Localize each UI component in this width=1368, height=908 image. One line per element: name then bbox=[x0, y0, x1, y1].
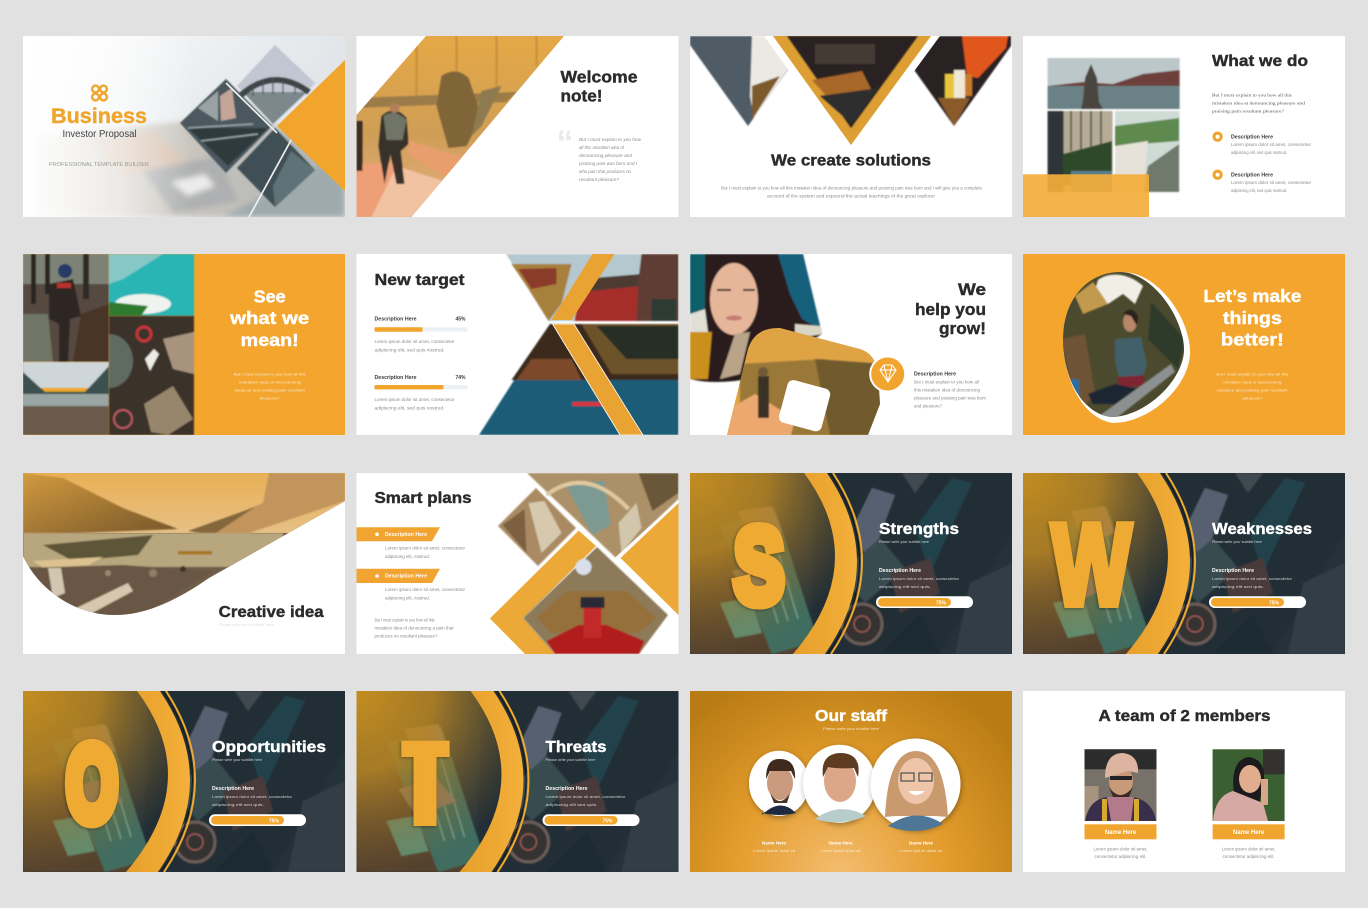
description: But I must explain to you how all bbox=[914, 380, 979, 384]
description: pleasure and praising pain was born bbox=[914, 396, 987, 400]
description bbox=[212, 786, 293, 807]
member one: Lorem ipsum dolor sit amet, bbox=[1094, 846, 1148, 851]
name three bbox=[900, 840, 943, 853]
title: We help you grow: We bbox=[958, 281, 986, 299]
progress: 45%: Lorem ipsum dolor sit amet, consectetur bbox=[374, 339, 455, 344]
photo: lower water diamond bbox=[237, 128, 315, 207]
name two: Name Here bbox=[829, 840, 853, 846]
title: See what we mean: See bbox=[254, 287, 286, 307]
orange ring bbox=[126, 691, 195, 872]
member two: Name Here bbox=[1233, 830, 1265, 836]
panel: slide 9 Creative idea bbox=[23, 473, 345, 654]
body text: But I must explain to you how all this bbox=[1212, 92, 1292, 98]
orange tag two: Description Here bbox=[385, 574, 427, 580]
quote text: resultant pleasure? bbox=[579, 177, 620, 182]
member two bbox=[1213, 749, 1285, 859]
photo: mountain lake bbox=[23, 362, 109, 435]
panel: slide 11 Strengths bbox=[690, 473, 1012, 654]
title: We help you grow bbox=[915, 281, 986, 338]
quote text: But I must explain to you how bbox=[579, 137, 642, 142]
progress: 74%: 74% bbox=[455, 375, 466, 381]
panel: slide 10 Smart plans bbox=[356, 473, 678, 654]
description: Lorem ipsum dolor sit amet, consectetur bbox=[1212, 576, 1293, 581]
orange chevron bbox=[490, 530, 596, 654]
orange tag one bbox=[356, 527, 440, 541]
body text: pleasure? bbox=[1242, 396, 1263, 400]
description: adipiscing elit sed quis. bbox=[212, 802, 264, 807]
member one: Name Here bbox=[1105, 830, 1137, 836]
title: Welcome note: note! bbox=[560, 88, 602, 106]
photo: upper bridge diamond bbox=[237, 45, 315, 124]
subtitle: Please write your subtitle here bbox=[212, 757, 263, 762]
orange stripe upper bbox=[552, 254, 614, 320]
description: Lorem ipsum dolor sit amet, consectetur bbox=[546, 794, 626, 799]
photo: sea and stones bbox=[1048, 58, 1180, 109]
subtitle: Please write your subtitle here bbox=[823, 726, 880, 731]
progress: 45%: 45% bbox=[455, 317, 466, 323]
description one: adipiscing elit, sed quis nostrud. bbox=[1231, 150, 1287, 155]
photo: town upper band bbox=[506, 254, 678, 321]
description: Description Here bbox=[1212, 568, 1254, 574]
progress bar 75%: 75% bbox=[269, 818, 280, 824]
progress: 74% bbox=[374, 375, 468, 410]
body text bbox=[1216, 372, 1288, 400]
subtitle: Investor Proposal bbox=[62, 129, 136, 140]
text one bbox=[385, 546, 466, 559]
text two bbox=[385, 587, 466, 600]
title: We help you grow: help you bbox=[915, 301, 986, 319]
portrait: blonde woman bbox=[870, 738, 960, 831]
description one: Description Here bbox=[1231, 134, 1273, 140]
photo: right triangle bbox=[914, 36, 1012, 127]
progress bar 75% bbox=[209, 814, 306, 826]
orange ring bbox=[460, 691, 529, 872]
member one: consectetur adipiscing elit. bbox=[1094, 854, 1146, 859]
photo: orange parallelogram bbox=[356, 36, 566, 217]
progress: 45%: Description Here bbox=[374, 317, 417, 323]
icon: bullet one bbox=[1212, 132, 1223, 142]
description: Description Here bbox=[914, 372, 956, 378]
letter T bbox=[402, 716, 450, 850]
panel: slide 1 Business cover bbox=[23, 36, 345, 217]
title: Let's make things better: Let’s make bbox=[1203, 286, 1302, 306]
name two: Lorem ipsum dolor sit bbox=[821, 848, 862, 853]
photo: aerial city bbox=[690, 473, 1012, 654]
portrait: young man bbox=[803, 745, 876, 823]
progress: 74%: Lorem ipsum dolor sit amet, consectetur bbox=[374, 397, 455, 402]
name two bbox=[821, 840, 862, 853]
description: adipiscing elit sed quis. bbox=[546, 802, 598, 807]
quote text: all this mistaken idea of bbox=[579, 145, 625, 150]
progress: 45%: adipiscing elit, sed quis nostrud. bbox=[374, 348, 444, 352]
title: Creative idea: Creative idea bbox=[219, 604, 324, 621]
photo: plants and phone bbox=[1048, 111, 1113, 192]
body text bbox=[234, 372, 306, 400]
subtitle: Please write your subtitle here bbox=[219, 623, 274, 627]
title: We help you grow: grow! bbox=[939, 320, 986, 338]
photo: aerial city bbox=[1023, 473, 1345, 654]
text two: Lorem ipsum dolor sit amet, consectetur bbox=[385, 587, 466, 592]
progress bar 75%: 75% bbox=[1269, 600, 1280, 606]
body text: But I must explain to you how all this mistaken idea of denouncing pleasure and praising pain was born and I will give you a complete bbox=[721, 186, 983, 190]
quote text: denouncing pleasure and bbox=[579, 153, 633, 158]
name three: Lorem ipsum dolor sit bbox=[900, 848, 943, 853]
body text: pleasure? bbox=[260, 396, 281, 400]
photo: aerial city bbox=[356, 691, 678, 872]
orange ring bbox=[1126, 473, 1195, 654]
photo: hiker in forest bbox=[23, 254, 109, 362]
orange stripe lower bbox=[552, 324, 643, 435]
name one bbox=[753, 840, 796, 853]
title: Our staff: Our staff bbox=[815, 708, 888, 725]
description two bbox=[1231, 172, 1312, 193]
photo: aerial city bbox=[23, 691, 345, 872]
panel: slide 5 See what we mean bbox=[23, 254, 345, 435]
text one: adipiscing elit, nostrud. bbox=[385, 554, 430, 559]
progress bar 75% bbox=[876, 596, 973, 608]
title: Weaknesses: Weaknesses bbox=[1212, 521, 1312, 538]
letter O: O bbox=[66, 724, 118, 844]
description bbox=[1212, 568, 1293, 589]
title: Threats: Threats bbox=[546, 739, 606, 756]
body text bbox=[721, 186, 983, 198]
body text: mistaken idea of denouncing bbox=[1223, 380, 1281, 384]
photo: flat lay bbox=[109, 316, 194, 435]
orange ring bbox=[793, 473, 862, 654]
title: Opportunities: Opportunities bbox=[212, 739, 326, 756]
description bbox=[546, 786, 626, 807]
panel: slide 16 A team of 2 members bbox=[1023, 691, 1345, 872]
description one bbox=[1231, 134, 1312, 155]
orange V with photo bbox=[764, 36, 940, 157]
orange right triangle bbox=[620, 503, 678, 615]
title: Welcome note bbox=[560, 70, 638, 102]
tagline: PROFESSIONAL TEMPLATE BUILDER bbox=[49, 162, 149, 168]
title: See what we mean: what we bbox=[229, 308, 309, 328]
letter T: T bbox=[402, 716, 450, 850]
panel: slide 3 We create solutions bbox=[690, 36, 1012, 217]
title: Let's make things better bbox=[1203, 286, 1302, 350]
description: this mistaken idea of denouncing bbox=[914, 388, 981, 392]
panel: slide 4 What we do bbox=[1023, 36, 1345, 217]
body text: pleasure and praising pain resultant bbox=[235, 388, 306, 392]
title: Let's make things better: things bbox=[1223, 308, 1282, 328]
panel: slide 8 Let's make things better bbox=[1023, 254, 1345, 435]
photo: left arches diamond bbox=[498, 488, 576, 566]
photo: lake in orange tint bbox=[23, 473, 345, 654]
panel: slide 6 New target bbox=[356, 254, 678, 435]
subtitle: Please write your subtitle here bbox=[546, 757, 596, 762]
progress bar 75%: 75% bbox=[936, 600, 947, 606]
progress: 45% bbox=[374, 317, 468, 352]
title: Smart plans: Smart plans bbox=[374, 490, 472, 507]
description two: Description Here bbox=[1231, 172, 1273, 178]
photo: left triangle bbox=[690, 36, 788, 126]
description: Lorem ipsum dolor sit amet, consectetur bbox=[879, 576, 960, 581]
body text: mistaken idea of denouncing bbox=[239, 380, 301, 384]
photo: red carpet interior bbox=[523, 547, 668, 654]
orange block bbox=[1023, 174, 1149, 217]
body text: But I must explain to you how all this bbox=[234, 372, 306, 376]
orange tag two bbox=[356, 569, 440, 583]
photo: vaulted ceiling bbox=[527, 473, 678, 558]
description two: Lorem ipsum dolor sit amet, consectetur bbox=[1231, 180, 1312, 185]
photo: man on bench bbox=[1058, 269, 1188, 419]
name one: Name Here bbox=[762, 840, 786, 846]
orange triangle bbox=[277, 60, 345, 191]
progress: 74%: adipiscing elit, sed quis nostrud. bbox=[374, 406, 444, 410]
title: We create solutions: We create solutions bbox=[771, 153, 931, 170]
quote text bbox=[578, 137, 642, 182]
description: Description Here bbox=[879, 568, 921, 574]
icon: business logo bbox=[92, 86, 107, 100]
subtitle: Please write your subtitle here bbox=[1212, 539, 1263, 544]
photo: lake lower band bbox=[479, 324, 678, 435]
subtitle: Please write your subtitle here bbox=[879, 539, 930, 544]
letter S: S bbox=[734, 506, 784, 626]
title: See what we mean bbox=[230, 290, 309, 346]
icon: diamond badge bbox=[870, 356, 905, 392]
body text: account of the system and expound the actual teachings of the great explorer bbox=[767, 194, 936, 198]
body text: mistaken idea at denouncing pleasure and bbox=[1212, 100, 1306, 106]
description: and pleasure? bbox=[914, 404, 943, 408]
description one: Lorem ipsum dolor sit amet, consectetur bbox=[1231, 142, 1312, 147]
panel: slide 14 Threats bbox=[356, 691, 678, 872]
description bbox=[879, 568, 960, 589]
body text: pleasure and praising pain resultant bbox=[1217, 388, 1288, 392]
portrait: man with glasses bbox=[749, 751, 809, 816]
body text: praising pain resultant pleasure? bbox=[1212, 108, 1284, 114]
orange tag one: Description Here bbox=[385, 532, 427, 538]
description: adipiscing elit sed quis. bbox=[1212, 584, 1264, 589]
paragraph: But I must explain to you how all this bbox=[374, 618, 434, 622]
title: Welcome note: Welcome bbox=[560, 68, 638, 86]
description: Lorem ipsum dolor sit amet, consectetur bbox=[212, 794, 293, 799]
title: A team of 2 members: A team of 2 members bbox=[1098, 708, 1270, 725]
photo blob bbox=[720, 324, 885, 439]
member two: Lorem ipsum dolor sit amet, bbox=[1222, 846, 1276, 851]
progress bar 75% bbox=[542, 814, 640, 826]
title: See what we mean: mean! bbox=[241, 330, 299, 350]
progress bar 75%: 75% bbox=[602, 818, 613, 824]
body text bbox=[1212, 92, 1306, 114]
body text: But I must explain to you how all this bbox=[1216, 372, 1288, 376]
title: Strengths: Strengths bbox=[879, 521, 959, 538]
panel: slide 12 Weaknesses bbox=[1023, 473, 1345, 654]
photo: left harbour diamond bbox=[180, 79, 272, 173]
photo: woman portrait bbox=[690, 254, 822, 382]
description two: adipiscing elit, sed quis nostrud. bbox=[1231, 188, 1287, 193]
quote text: praising pain was born and I bbox=[578, 161, 638, 166]
name one: Lorem ipsum dolor sit bbox=[753, 848, 796, 853]
paragraph bbox=[374, 618, 454, 638]
member one bbox=[1084, 749, 1156, 859]
icon: quote mark: “ bbox=[556, 124, 574, 162]
title: New target: New target bbox=[374, 272, 464, 289]
description: adipiscing elit sed quis. bbox=[879, 584, 931, 589]
panel: slide 13 Opportunities bbox=[23, 691, 345, 872]
paragraph: mistaken idea of denouncing a pain that bbox=[374, 626, 454, 630]
white rounded square bbox=[778, 379, 832, 433]
description: Description Here bbox=[546, 786, 588, 792]
panel: slide 2 Welcome note bbox=[356, 36, 678, 217]
icon: bullet two bbox=[1212, 170, 1223, 180]
title: Business: Business bbox=[51, 103, 147, 128]
text two: adipiscing elit, nostrud. bbox=[385, 596, 430, 600]
panel: slide 7 We help you grow bbox=[690, 254, 1012, 439]
progress bar 75% bbox=[1209, 596, 1306, 608]
text one: Lorem ipsum dolor sit amet, consectetur bbox=[385, 546, 466, 550]
white blob bbox=[1063, 272, 1190, 423]
member two: consectetur adipiscing elit. bbox=[1223, 854, 1275, 859]
paragraph: produces no resultant pleasure? bbox=[374, 634, 438, 638]
title: Let's make things better: better! bbox=[1221, 330, 1284, 350]
photo: teal aerial bbox=[109, 254, 194, 316]
title: What we do: What we do bbox=[1212, 53, 1308, 70]
letter W: W bbox=[1052, 502, 1131, 629]
description bbox=[914, 372, 987, 408]
name three: Name Here bbox=[909, 840, 933, 846]
photo: white buildings bbox=[1115, 111, 1180, 192]
panel: slide 15 Our staff bbox=[690, 691, 1012, 872]
progress: 74%: Description Here bbox=[374, 375, 417, 381]
quote text: who pain that produces no bbox=[579, 169, 632, 174]
description: Description Here bbox=[212, 786, 254, 792]
